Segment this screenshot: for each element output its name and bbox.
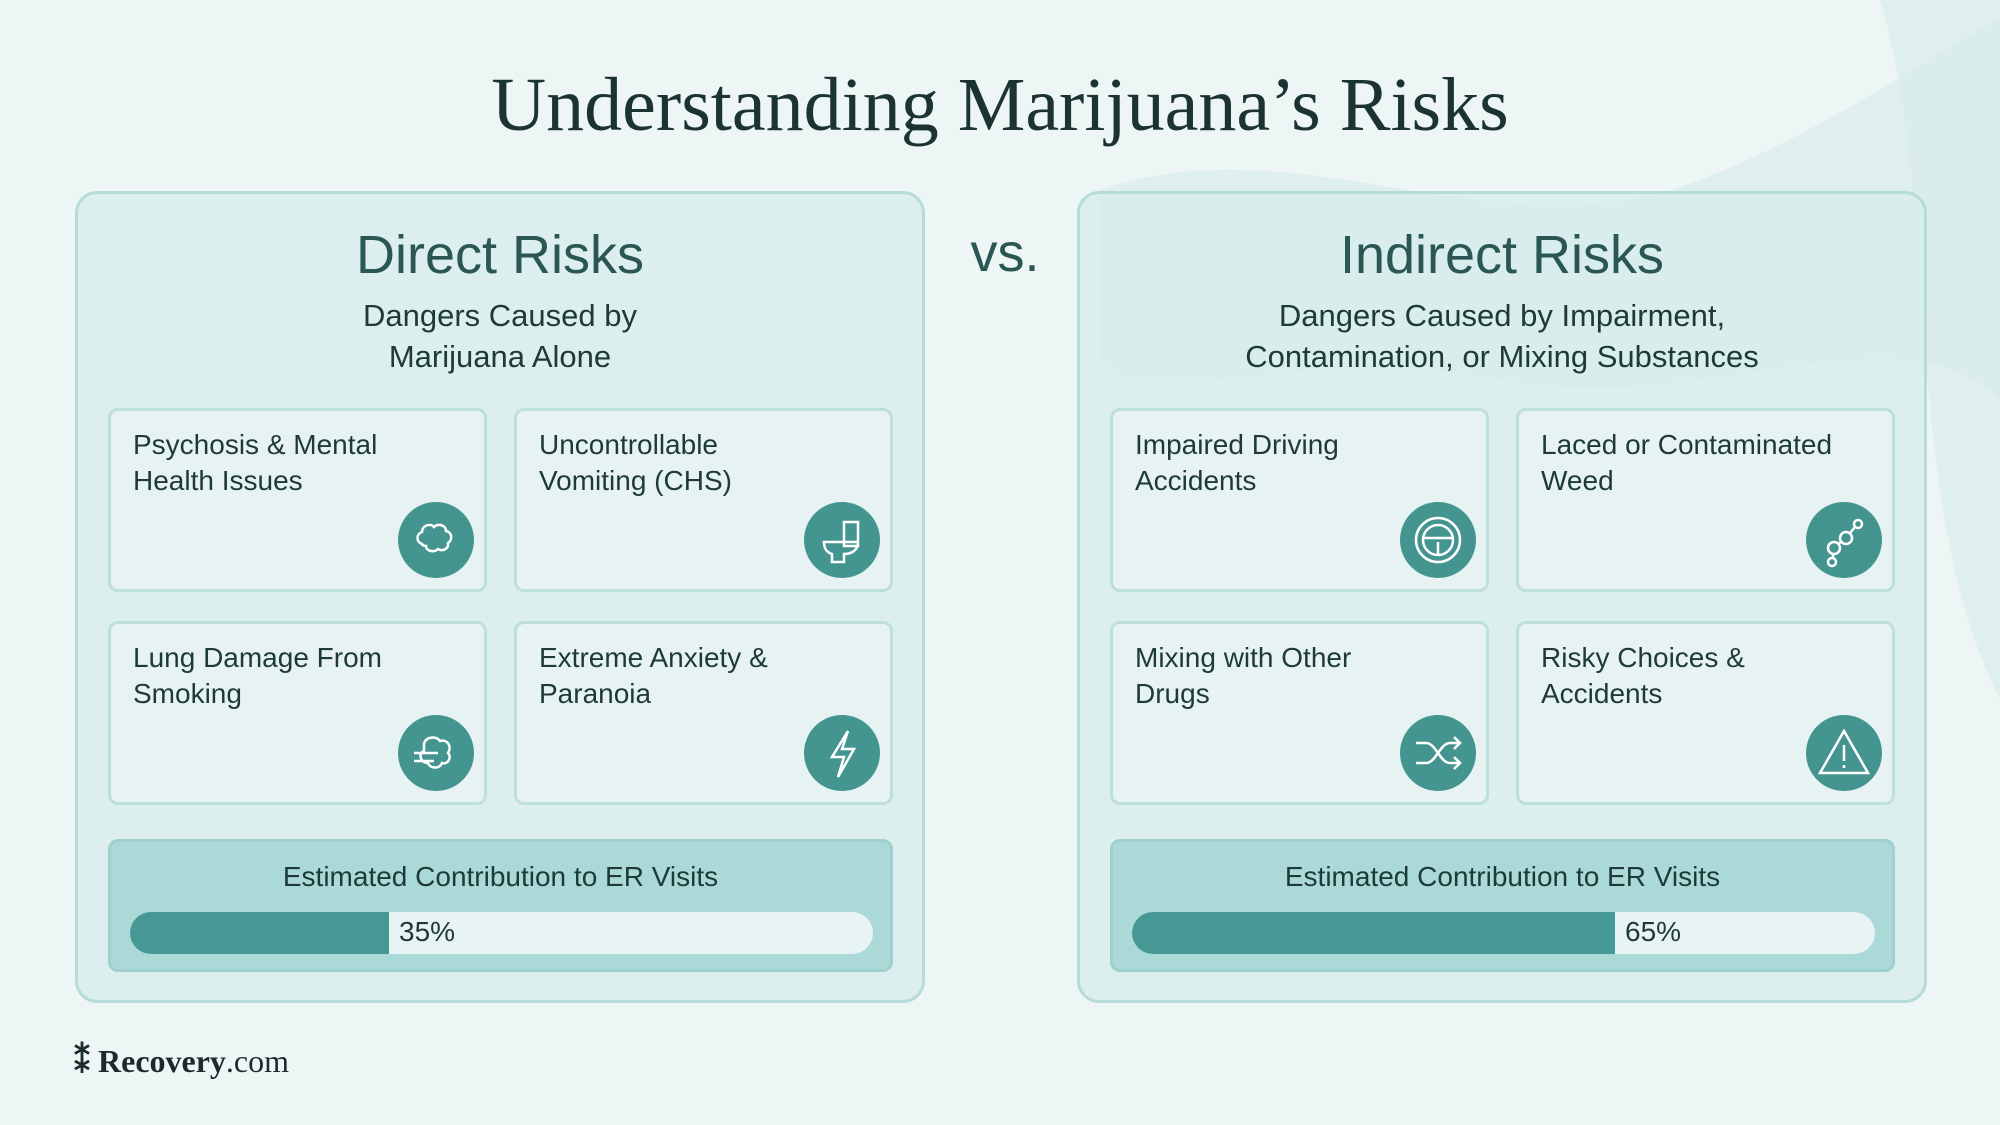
card: psychosis	[108, 408, 487, 592]
card: risky choices: Risky Choices &	[1541, 642, 1745, 673]
subtitle: indirect: Contamination, or Mixing Substances	[1245, 339, 1759, 374]
card: driving: Impaired Driving	[1135, 429, 1339, 460]
card: mixing drugs	[1110, 621, 1489, 805]
heading: direct: Direct Risks	[356, 225, 644, 285]
card: vomiting	[514, 408, 893, 592]
card: anxiety	[514, 621, 893, 805]
card: anxiety: Paranoia	[539, 678, 651, 709]
card: laced weed: Laced or Contaminated	[1541, 429, 1832, 460]
ER bar: indirect 65%: Estimated Contribution to ER Visits	[1285, 861, 1720, 892]
card: laced weed: Weed	[1541, 465, 1614, 496]
card: risky choices: Accidents	[1541, 678, 1662, 709]
panel: indirect risks	[1077, 191, 1927, 1003]
heading: indirect: Indirect Risks	[1340, 225, 1664, 285]
card: vomiting: Uncontrollable	[539, 429, 718, 460]
card: psychosis: Psychosis & Mental	[133, 429, 377, 460]
card: laced weed	[1516, 408, 1895, 592]
ER bar: direct 35%: Estimated Contribution to ER Visits	[283, 861, 718, 892]
ER bar: indirect 65%	[1110, 839, 1895, 972]
ER bar: indirect 65%: 65%	[1625, 916, 1681, 947]
card: driving	[1110, 408, 1489, 592]
vs label: vs.	[970, 223, 1040, 283]
panel: direct risks	[75, 191, 925, 1003]
subtitle: direct: Marijuana Alone	[389, 339, 611, 374]
subtitle: direct: Dangers Caused by	[363, 298, 637, 333]
title: Understanding Marijuana’s Risks	[491, 63, 1509, 147]
card: anxiety: Extreme Anxiety &	[539, 642, 768, 673]
card: lung damage	[108, 621, 487, 805]
card: mixing drugs: Mixing with Other	[1135, 642, 1351, 673]
ER bar: direct 35%: 35%	[399, 916, 455, 947]
card: driving: Accidents	[1135, 465, 1256, 496]
ER bar: direct 35%	[108, 839, 893, 972]
subtitle: indirect: Dangers Caused by Impairment,	[1279, 298, 1725, 333]
subtitle: indirect	[1245, 298, 1759, 374]
logo: ⁑ Recovery.com	[74, 1043, 289, 1079]
card: lung damage: Lung Damage From	[133, 642, 382, 673]
card: psychosis: Health Issues	[133, 465, 303, 496]
card: lung damage: Smoking	[133, 678, 242, 709]
card: vomiting: Vomiting (CHS)	[539, 465, 732, 496]
card: mixing drugs: Drugs	[1135, 678, 1210, 709]
card: risky choices	[1516, 621, 1895, 805]
subtitle: direct	[363, 298, 637, 374]
